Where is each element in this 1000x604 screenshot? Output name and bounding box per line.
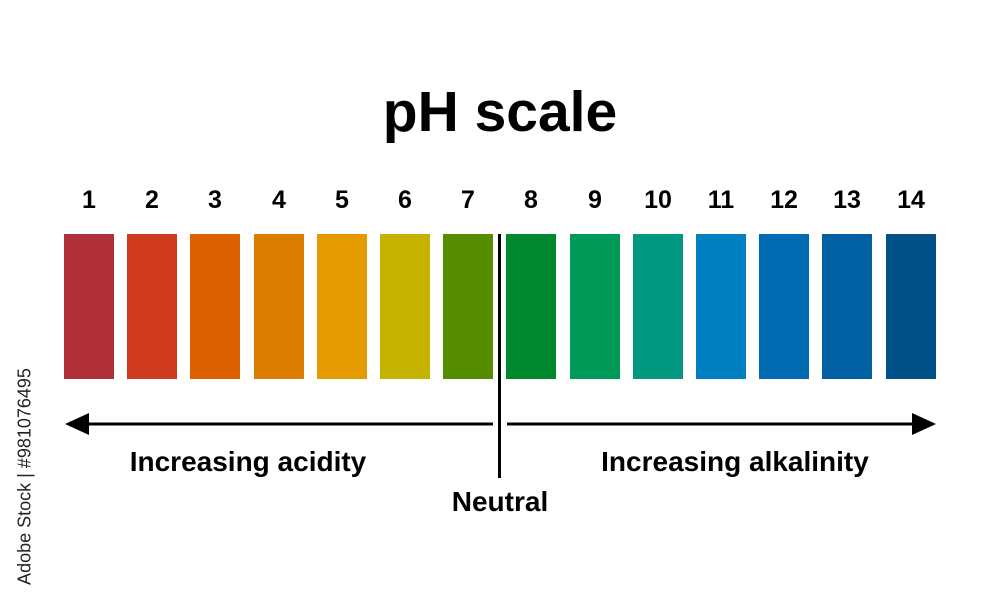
arrow: acidity (left) bbox=[65, 413, 493, 435]
scale numbers: 8 bbox=[524, 186, 538, 214]
scale numbers: 13 bbox=[833, 186, 861, 214]
scale numbers: 14 bbox=[897, 186, 925, 214]
scale numbers: 4 bbox=[272, 186, 286, 214]
scale numbers: 1 bbox=[82, 186, 96, 214]
label: increasing alkalinity: Increasing alkalinity bbox=[601, 446, 869, 477]
watermark vertical text: Adobe Stock | #981076495 bbox=[14, 368, 34, 585]
scale numbers: 9 bbox=[588, 186, 602, 214]
label: increasing acidity: Increasing acidity bbox=[130, 446, 366, 477]
scale numbers: 3 bbox=[208, 186, 222, 214]
scale numbers: 10 bbox=[644, 186, 672, 214]
label: neutral: Neutral bbox=[452, 486, 548, 517]
scale numbers: 12 bbox=[770, 186, 798, 214]
neutral divider line bbox=[498, 234, 501, 478]
scale numbers: 7 bbox=[461, 186, 475, 214]
color bars bbox=[64, 234, 936, 379]
scale numbers: 5 bbox=[335, 186, 349, 214]
scale numbers bbox=[82, 186, 925, 214]
scale numbers: 11 bbox=[708, 186, 734, 214]
scale numbers: 2 bbox=[145, 186, 159, 214]
title: pH scale bbox=[383, 80, 617, 144]
arrow: alkalinity (right) bbox=[507, 413, 936, 435]
scale numbers: 6 bbox=[398, 186, 412, 214]
